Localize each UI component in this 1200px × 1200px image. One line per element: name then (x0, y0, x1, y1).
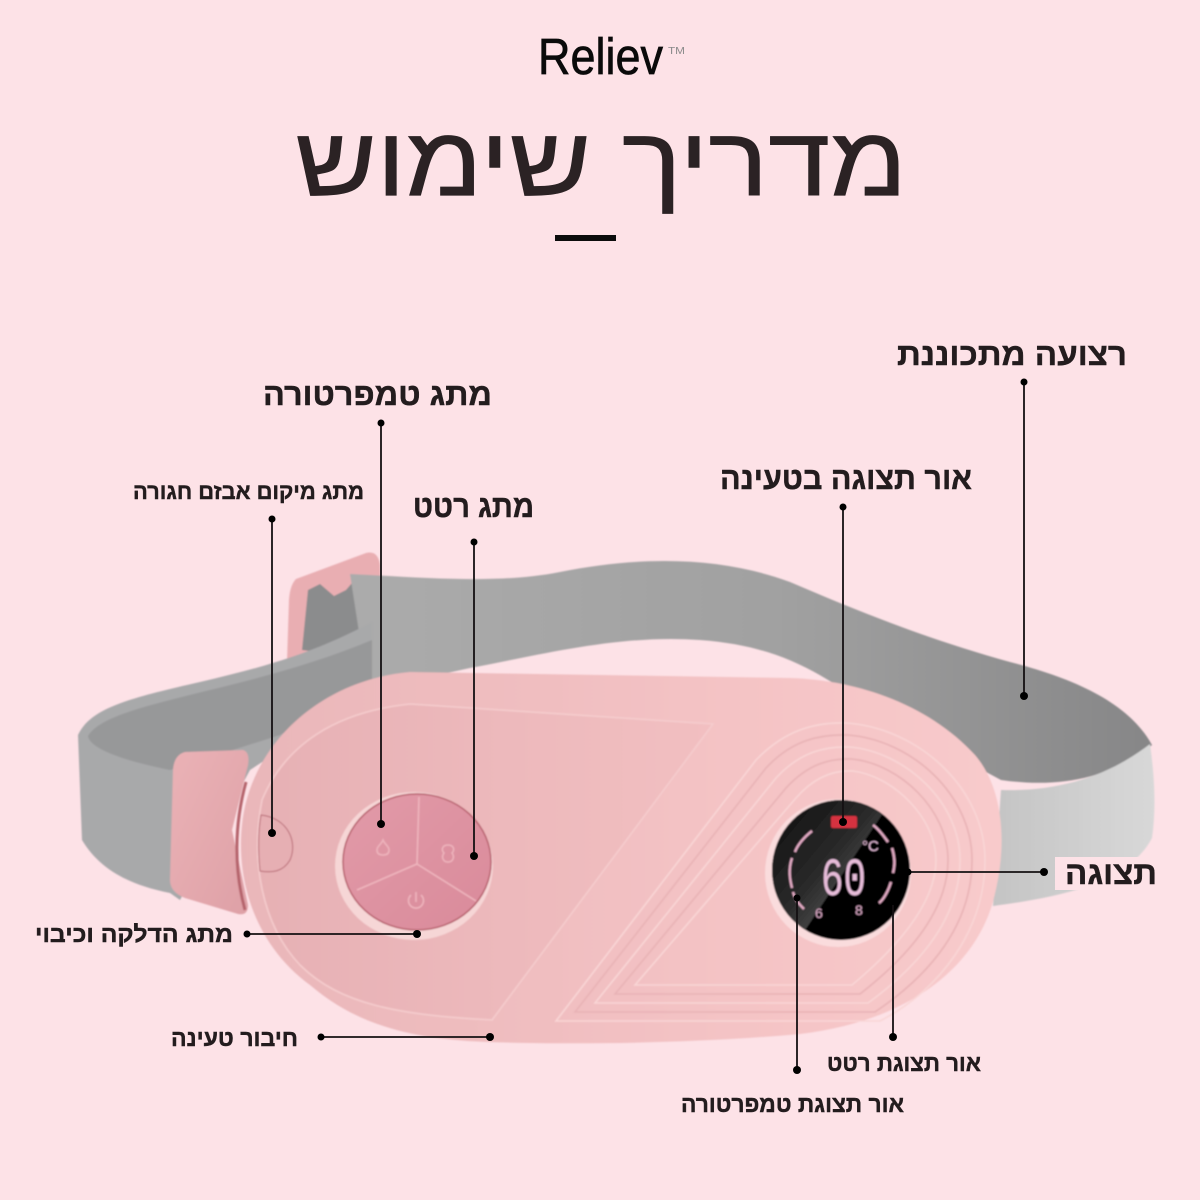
folded strap at buckle (302, 576, 372, 655)
product: heating belt (78, 552, 1154, 1043)
right strap front (993, 744, 1154, 906)
title underline bar (555, 235, 616, 241)
rear strap (350, 561, 1152, 783)
callout: temperature switch (263, 377, 492, 828)
title: מדריך שימוש (295, 106, 907, 216)
side clip notch (259, 815, 293, 872)
callout: vibration switch: מתג רטט (413, 489, 534, 524)
callout: adjustable strap: רצועה מתכוננת (897, 337, 1127, 372)
callout: charging connection: חיבור טעינה (171, 1025, 298, 1051)
body outer shell (241, 672, 1002, 1043)
display arcs (790, 825, 894, 909)
raised ridged area (556, 723, 985, 1021)
callout: belt buckle position switch (133, 479, 364, 837)
icon: vibration (442, 845, 454, 862)
button ring (335, 792, 493, 940)
display mode icons (815, 902, 863, 921)
callout: vibration display light (827, 905, 981, 1076)
strap buckle (170, 750, 248, 914)
callout: display: תצוגה (1065, 855, 1157, 891)
button dividers (357, 797, 476, 901)
callout: power switch: מתג הדלקה וכיבוי (35, 921, 233, 947)
inner left panel (258, 704, 713, 1020)
display mode icons: 8 (855, 902, 863, 918)
display mode icons: 6 (815, 905, 823, 921)
icon: power (409, 892, 424, 908)
body seam (237, 782, 246, 910)
display screen (770, 798, 915, 945)
callout: charging display light: אור תצוגה בטעינה (720, 461, 972, 496)
degree symbol: °C (862, 838, 879, 855)
callout: power switch (35, 921, 421, 947)
display reading: 60 (821, 851, 866, 912)
callout: temperature display light (681, 894, 904, 1117)
callout: vibration display light: אור תצוגת רטט (827, 1050, 981, 1076)
control button (343, 794, 491, 930)
left strap inner fold (88, 640, 372, 770)
logo: Reliev: Reliev (538, 28, 663, 85)
logo: Reliev: TM (668, 46, 685, 57)
back buckle (287, 552, 381, 662)
callout: belt buckle position switch: מתג מיקום אבזם חגורה (133, 479, 364, 504)
display ring (765, 799, 911, 947)
icon: temperature drop (377, 840, 389, 855)
callout: adjustable strap (897, 337, 1127, 700)
callout: temperature display light: אור תצוגת טמפרטורה (681, 1091, 904, 1117)
left strap (78, 622, 372, 900)
callout: temperature switch: מתג טמפרטורה (263, 377, 492, 412)
callout: charging connection (171, 1025, 494, 1051)
callout: charging display light (720, 461, 972, 826)
callout: display (904, 855, 1157, 891)
callout: vibration switch (413, 489, 534, 860)
charging indicator (831, 816, 857, 828)
